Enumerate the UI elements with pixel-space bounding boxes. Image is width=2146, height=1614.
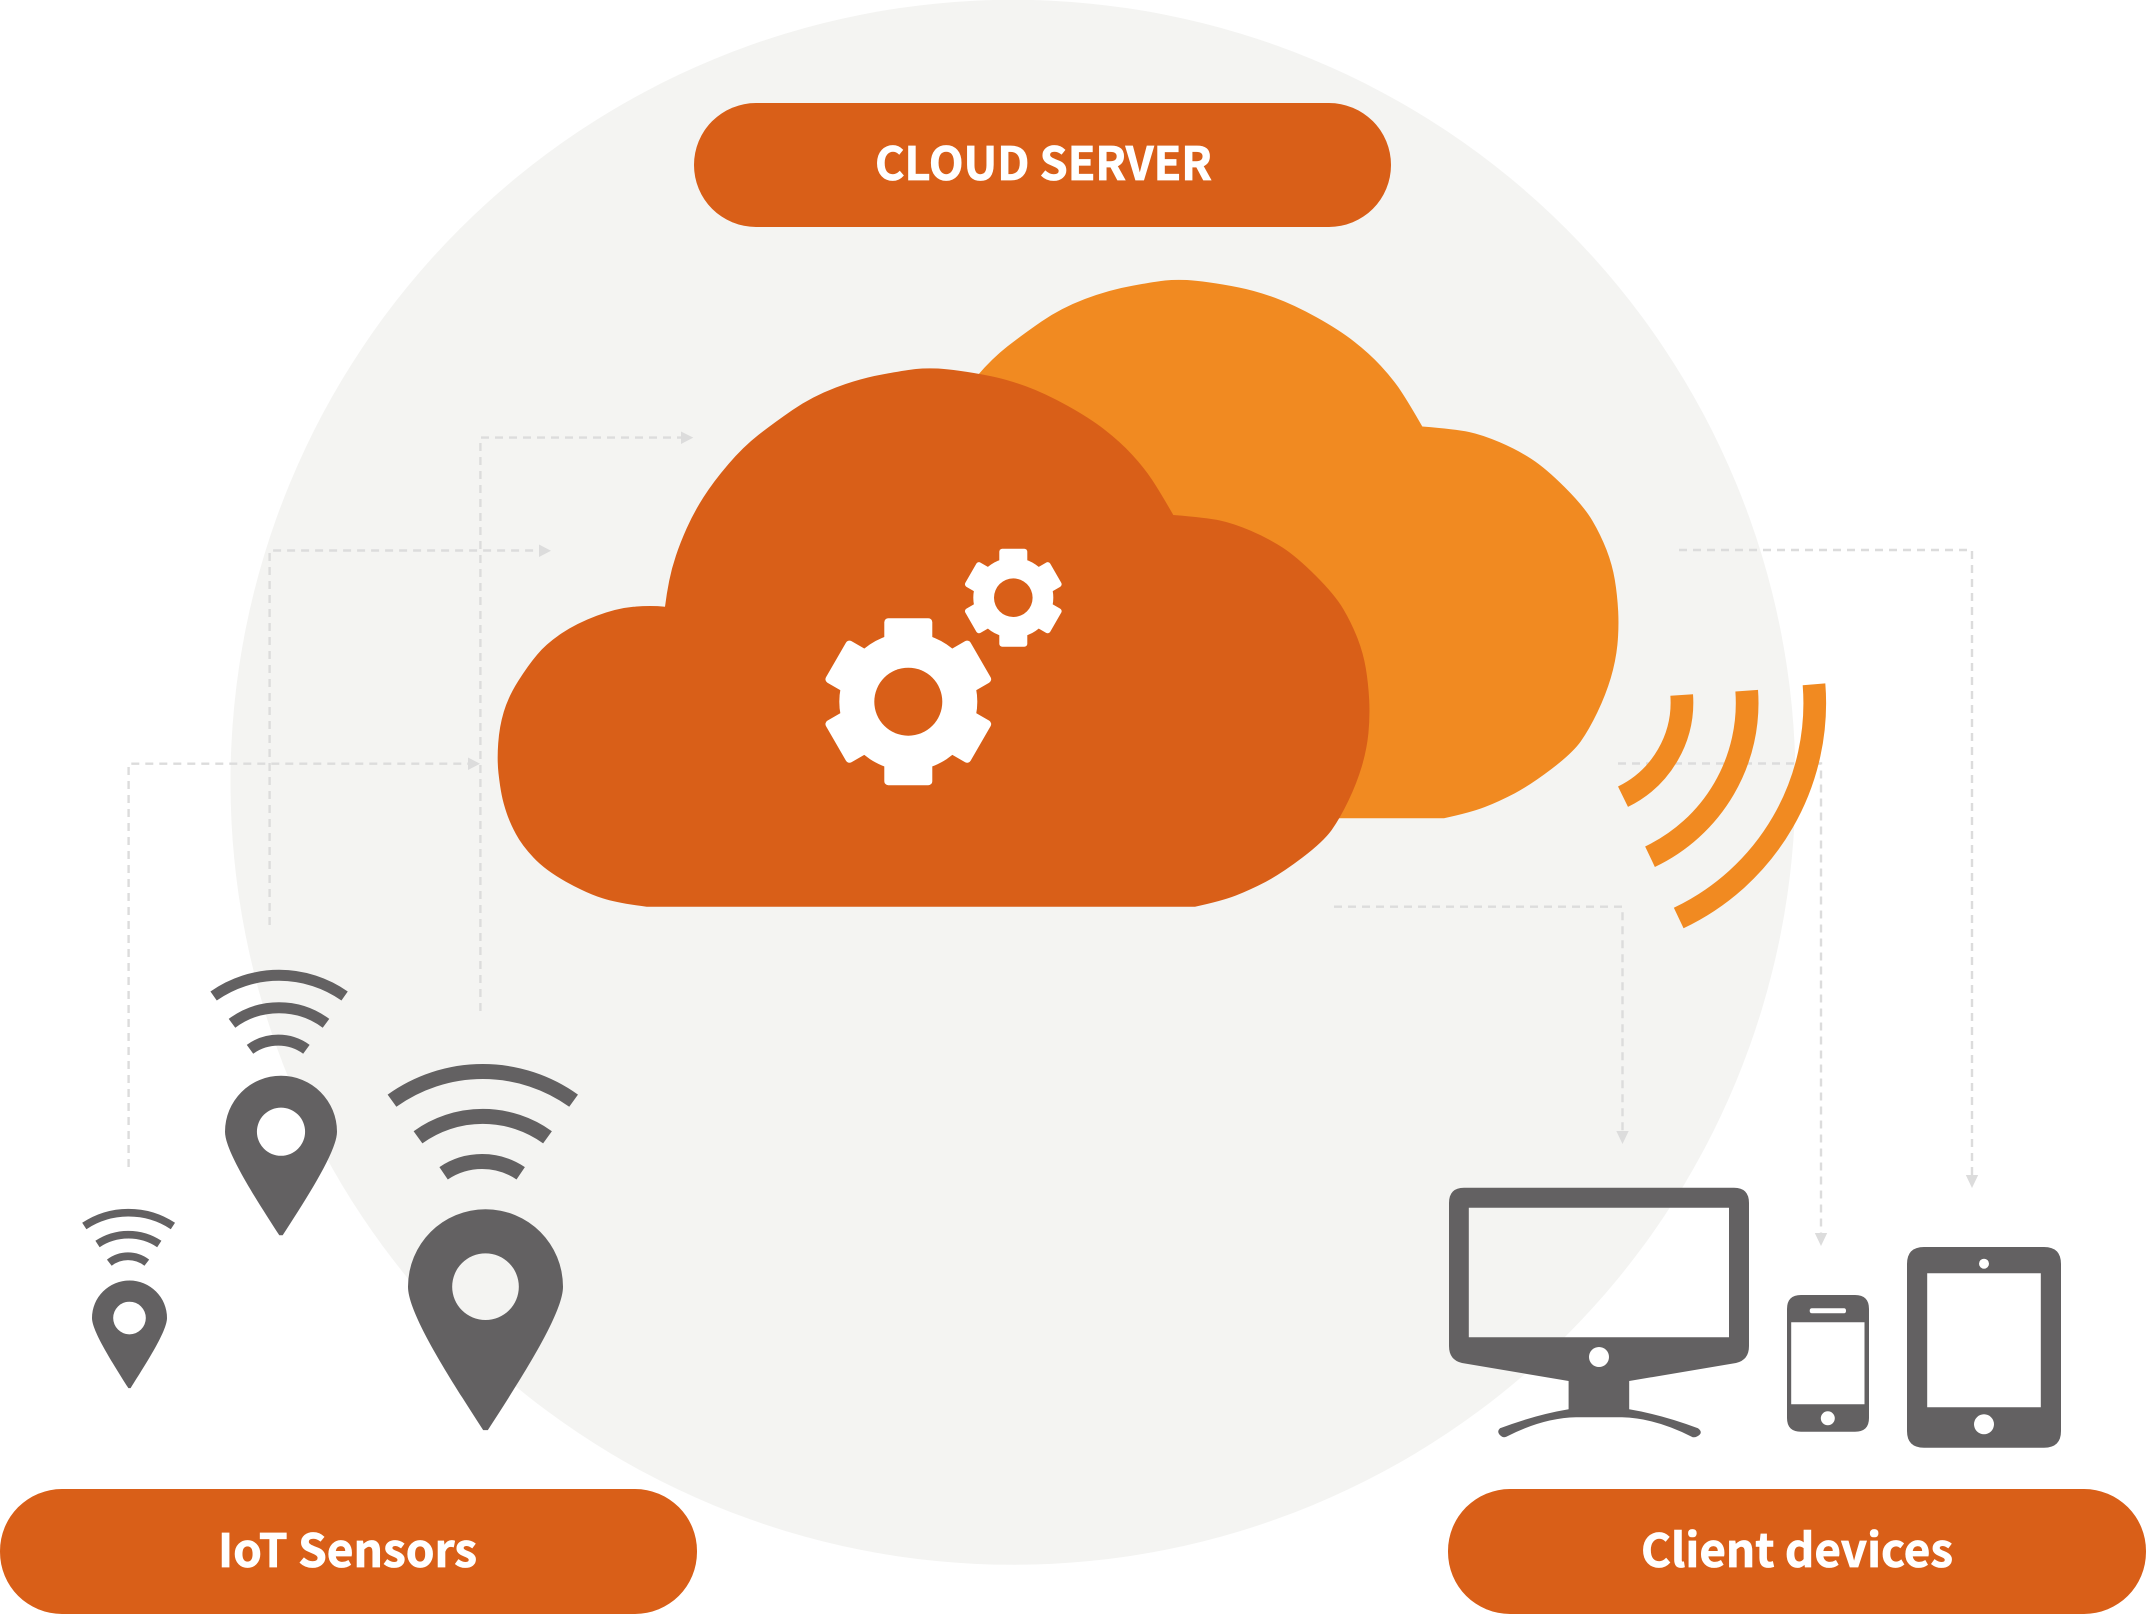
heading pill: IoT sensors bbox=[0, 1489, 697, 1614]
heading pill: cloud server: CLOUD SERVER bbox=[875, 128, 1212, 194]
arrow: sensor 3 to cloud bbox=[480, 432, 693, 1011]
icon: medium sensor pin with signal bbox=[214, 975, 345, 1235]
heading pill: client devices: Client devices bbox=[1641, 1515, 1953, 1581]
icon: large sensor pin with signal bbox=[392, 1072, 574, 1430]
icon: large gear bbox=[824, 618, 993, 785]
arrow: cloud to tablet bbox=[1679, 550, 1978, 1188]
cloud: back orange bbox=[747, 280, 1618, 818]
arrow: cloud to monitor bbox=[1334, 907, 1629, 1144]
icon: tablet bbox=[1907, 1247, 2061, 1448]
arrow: sensor 2 to cloud bbox=[270, 544, 551, 925]
icon: cloud wireless signal bbox=[1623, 684, 1815, 918]
background circle bbox=[230, 0, 1796, 1565]
icon: smartphone bbox=[1787, 1295, 1869, 1432]
cloud: front dark orange bbox=[498, 368, 1369, 907]
arrow: cloud to phone bbox=[1618, 764, 1827, 1246]
heading pill: cloud server bbox=[694, 103, 1391, 227]
arrow: sensor 1 to cloud bbox=[129, 758, 480, 1167]
heading pill: IoT sensors: IoT Sensors bbox=[218, 1515, 477, 1581]
icon: desktop monitor bbox=[1449, 1188, 1749, 1437]
heading pill: client devices bbox=[1448, 1489, 2146, 1614]
icon: small sensor pin with signal bbox=[84, 1213, 173, 1388]
icon: small gear bbox=[964, 549, 1063, 647]
